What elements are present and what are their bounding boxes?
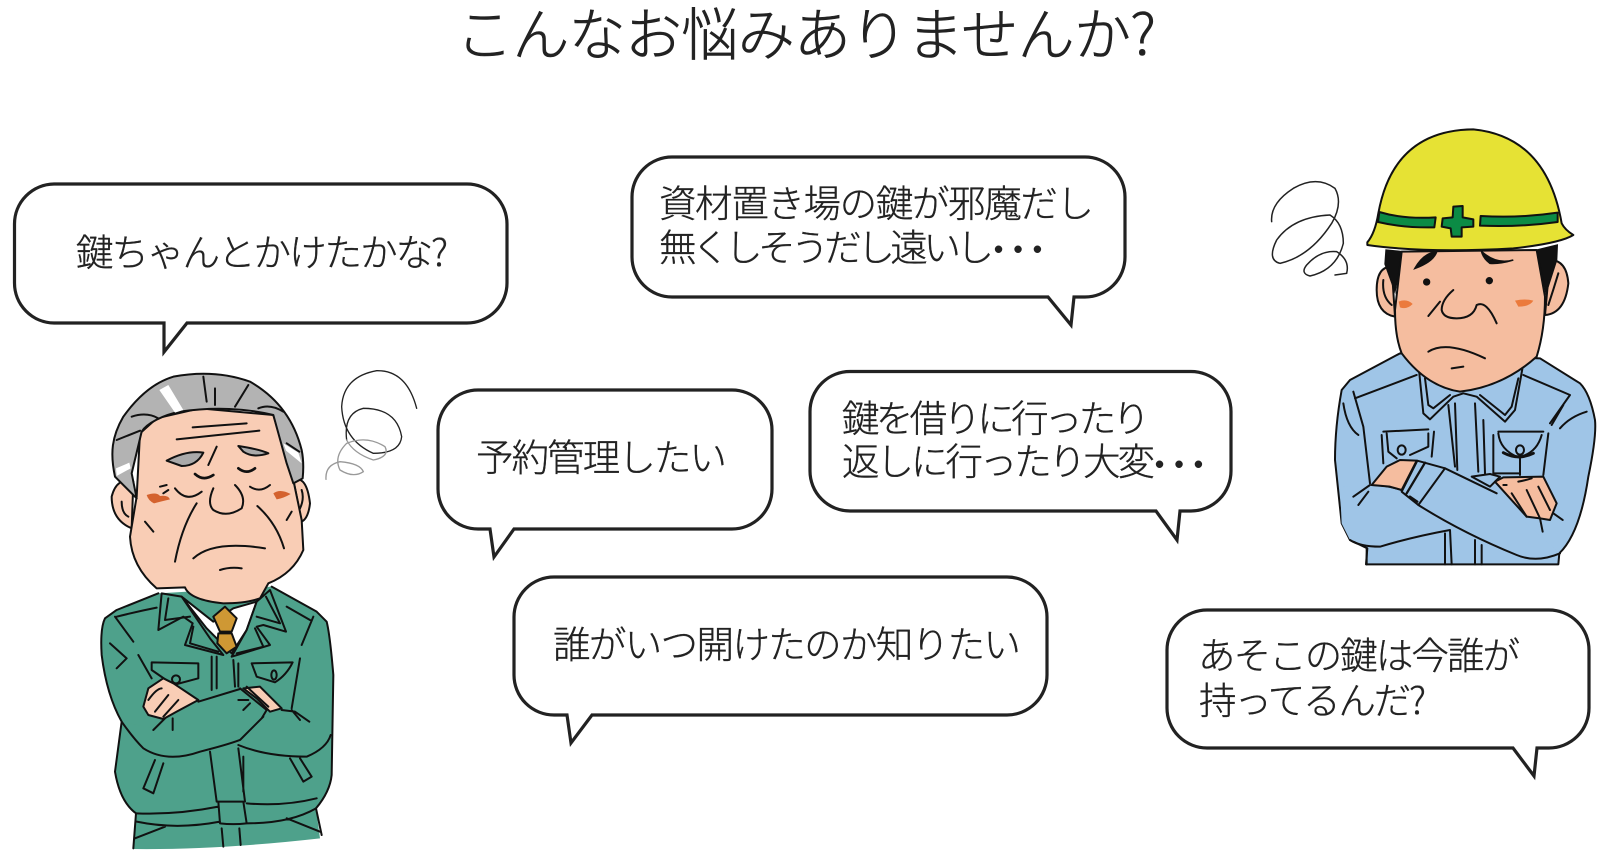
near hand <box>1372 460 1417 490</box>
speech bubble: who has the key <box>1167 610 1589 776</box>
back hand cuff <box>1472 474 1500 487</box>
speech bubble: storage key: ••• <box>994 234 1042 264</box>
closed eyes <box>195 468 255 478</box>
pocket buttons <box>1398 445 1524 455</box>
near hand <box>143 678 198 719</box>
speech bubble: storage key: 資材置き場の鍵が邪魔だし <box>659 183 1094 225</box>
chest pockets <box>152 662 293 685</box>
forehead wrinkles <box>177 423 259 439</box>
speech bubble: who has the key: 持ってるんだ? <box>1199 670 1426 725</box>
far hand <box>243 687 282 712</box>
ears <box>1377 260 1568 317</box>
arm folds and edges <box>122 687 331 757</box>
speech bubble: reservation management: 予約管理したい <box>476 437 727 479</box>
cheeks <box>1399 299 1533 308</box>
pocket buttons <box>172 670 277 683</box>
jacket body <box>1335 353 1595 564</box>
jacket body <box>101 587 333 849</box>
flap shadow <box>1503 453 1533 457</box>
creases <box>145 447 292 562</box>
speech bubble: borrowing and returning: 鍵を借りに行ったり <box>842 398 1150 440</box>
eyes <box>1423 277 1493 286</box>
mouth <box>1428 347 1485 368</box>
hair lines <box>117 377 299 452</box>
sleeve cuff <box>1402 461 1445 505</box>
helmet green stripes <box>1378 212 1558 227</box>
mouth <box>193 546 265 570</box>
collar inner lines <box>165 597 280 653</box>
speech bubble: storage key: 無くしそうだし遠いし <box>659 227 994 269</box>
face <box>130 408 303 603</box>
speech bubble: storage key <box>632 157 1125 325</box>
hair highlights <box>116 385 302 476</box>
fingers <box>1503 478 1563 532</box>
ear detail <box>122 490 303 517</box>
cuff lines <box>1407 463 1425 502</box>
chest pockets <box>1382 429 1548 475</box>
ears <box>112 479 310 528</box>
speech bubble: reservation management <box>438 390 772 557</box>
illustration: worker in yellow helmet <box>1272 129 1595 564</box>
nose <box>1428 290 1497 323</box>
speech bubble: borrowing and returning <box>810 372 1231 540</box>
speech bubble: who opened it <box>514 577 1047 743</box>
collar <box>1418 363 1523 422</box>
speech bubble: did I lock it: 鍵ちゃんとかけたかな? <box>76 222 448 277</box>
ear detail <box>1383 273 1558 305</box>
nose <box>210 485 243 514</box>
shirt <box>182 597 257 653</box>
speech bubble: borrowing and returning: 返しに行ったり大変 <box>842 441 1155 483</box>
worry spiral <box>1272 182 1347 276</box>
hair <box>1385 245 1557 293</box>
face <box>1395 250 1545 392</box>
jacket seams <box>1343 375 1587 483</box>
fingers <box>148 688 178 717</box>
speech bubble: did I lock it <box>14 184 507 352</box>
jacket and arms <box>101 587 333 849</box>
helmet <box>1367 129 1573 250</box>
worry spiral <box>342 371 417 453</box>
jacket outline <box>101 587 333 848</box>
fading spiral <box>326 440 386 479</box>
illustration: older man in green jacket <box>101 371 417 849</box>
collar <box>158 590 286 657</box>
speech bubble: who opened it: 誰がいつ開けたのか知りたい <box>553 624 1021 666</box>
eyebrows <box>1415 252 1513 268</box>
arm lines <box>1350 468 1560 564</box>
heavy eyelids <box>167 446 268 466</box>
near sleeve <box>122 688 263 757</box>
jacket seams <box>110 607 320 847</box>
hair <box>112 374 303 498</box>
speech bubble: borrowing and returning: ••• <box>1155 449 1203 479</box>
far hand <box>1495 477 1557 520</box>
helmet green cross <box>1442 206 1473 237</box>
arm fill <box>1340 468 1560 555</box>
tie <box>213 607 237 653</box>
collar inner lines <box>1425 378 1518 415</box>
cheeks <box>147 491 291 503</box>
speech bubble: who has the key: あそこの鍵は今誰が <box>1198 635 1520 677</box>
jacket and arms <box>1335 353 1595 564</box>
